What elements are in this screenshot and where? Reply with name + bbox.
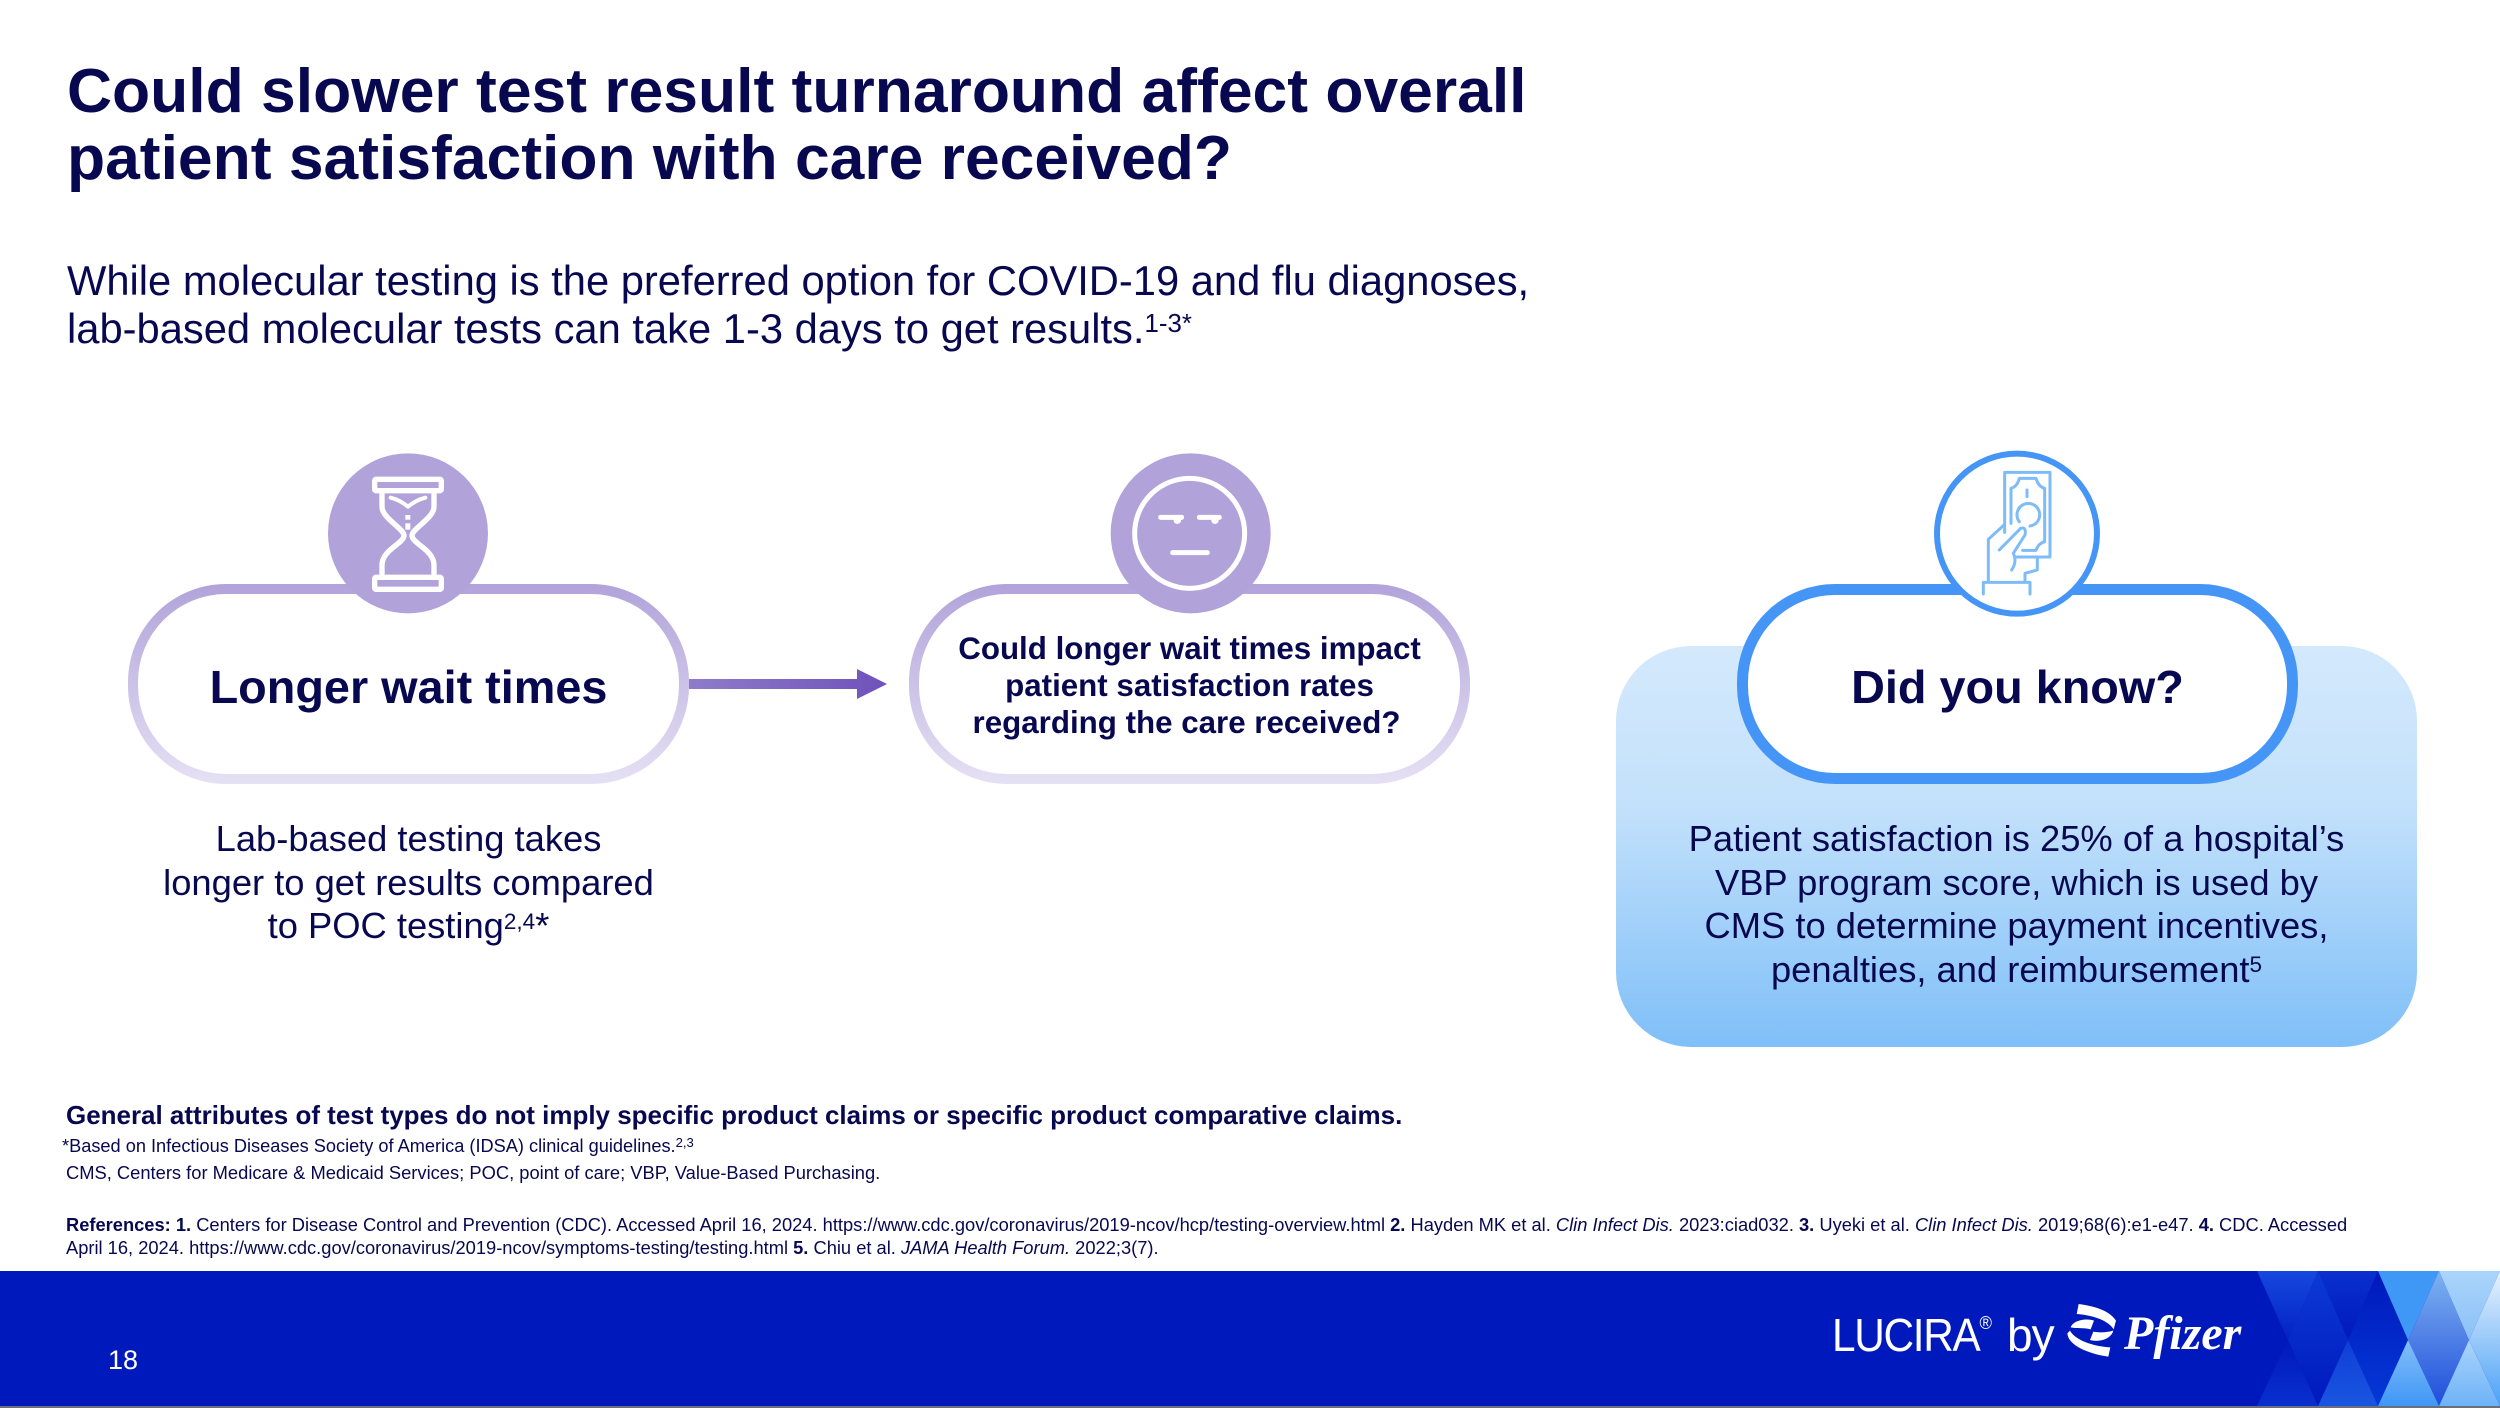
logo text: pfizer: Pfizer: [2124, 1307, 2241, 1360]
logo: pfizer mark: [2067, 1304, 2116, 1357]
question text: [958, 631, 1421, 740]
references: References: 1. Centers for Disease Control and Prevention (CDC). Accessed April 16, 2024. https://www.cdc.gov/coronavirus/2019-ncov/hcp/testing-overview.html 2. Hayden MK et al. Clin Infect Dis. 2023:ciad032. 3. Uyeki et al. Clin Infect Dis. 2019;68(6):e1-e47. 4. CDC. Accessed: [66, 1214, 2347, 1235]
body text: lab-based testing: [163, 818, 654, 946]
title: patient satisfaction with care received?: [67, 124, 1232, 193]
logo text: by: by: [2007, 1309, 2054, 1361]
subtitle text: While molecular testing is the preferred option for COVID-19 and flu diagnoses,: [67, 257, 1529, 304]
body text: patient satisfaction: [1689, 818, 2344, 990]
footnote: based on idsa: *Based on Infectious Diseases Society of America (IDSA) clinical guidelines.2,3: [62, 1134, 694, 1156]
pill: question: [909, 584, 1470, 784]
pill: longer wait times: [128, 584, 689, 784]
footer band: [0, 1271, 2500, 1406]
footer pattern: [2257, 1271, 2500, 1406]
footnote: abbreviations: CMS, Centers for Medicare & Medicaid Services; POC, point of care; VBP, Value-Based Purchasing.: [66, 1162, 880, 1183]
footer bottom rule: [0, 1406, 2500, 1408]
body text: patient satisfaction: Patient satisfaction is 25% of a hospital’s: [1689, 818, 2344, 859]
body text: patient satisfaction: CMS to determine payment incentives,: [1705, 905, 2328, 946]
body text: lab-based testing: longer to get results compared: [163, 862, 654, 903]
heading: longer wait times: Longer wait times: [210, 661, 607, 713]
disclaimer heading: General attributes of test types do not imply specific product claims or specific product comparative claims.: [66, 1100, 1402, 1130]
question text: Could longer wait times impact: [958, 631, 1421, 666]
references: April 16, 2024. https://www.cdc.gov/coronavirus/2019-ncov/symptoms-testing/testing.html 5. Chiu et al. JAMA Health Forum. 2022;3(7).: [66, 1237, 1159, 1258]
panel: did you know: [1616, 646, 2417, 1047]
question text: regarding the care received?: [973, 705, 1400, 740]
body text: lab-based testing: to POC testing2,4*: [268, 905, 549, 946]
question text: patient satisfaction rates: [1005, 668, 1374, 703]
references: [66, 1214, 2347, 1258]
panel: could longer wait times: [909, 453, 1470, 784]
body text: patient satisfaction: VBP program score, which is used by: [1715, 862, 2318, 903]
body text: patient satisfaction: penalties, and reimbursement5: [1771, 949, 2262, 990]
title: [67, 57, 1527, 193]
logo text: lucira: LUCIRA®: [1832, 1309, 1991, 1361]
page number: 18: [108, 1345, 138, 1375]
heading: did you know: Did you know?: [1851, 661, 2184, 713]
title: Could slower test result turnaround affect overall: [67, 57, 1527, 126]
panel: longer wait times: [128, 453, 689, 946]
subtitle text: [67, 257, 1529, 352]
subtitle text: lab-based molecular tests can take 1-3 days to get results.1-3*: [67, 305, 1192, 352]
body text: lab-based testing: Lab-based testing takes: [216, 818, 601, 859]
pill: did you know: [1737, 584, 2298, 784]
